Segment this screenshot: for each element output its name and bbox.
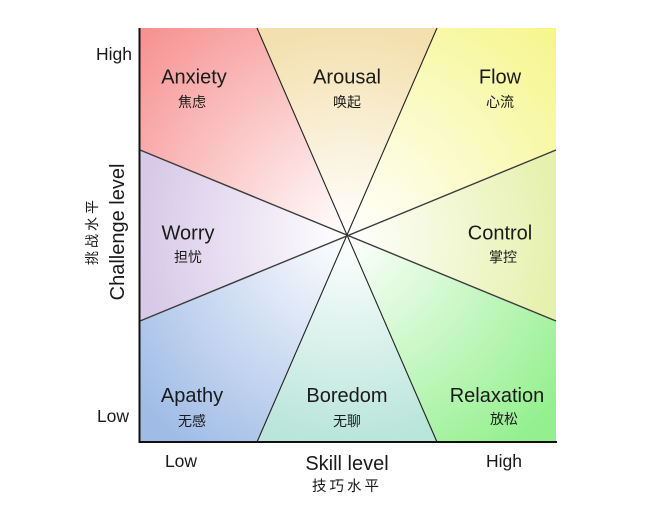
y axis tick: high: High: [96, 44, 132, 64]
label: boredom: [306, 385, 388, 429]
x axis tick: high: High: [486, 451, 522, 471]
label: control: Control: [468, 222, 532, 244]
x axis tick: low: Low: [165, 451, 197, 471]
panel: anxiety wedge: [140, 28, 347, 235]
label: apathy: [161, 385, 223, 429]
panel: flow wedge: [347, 28, 556, 235]
label: control: 掌控: [489, 249, 517, 265]
label: arousal: [313, 66, 381, 110]
label: worry: [162, 222, 214, 265]
label: flow: [479, 66, 522, 110]
wedge dividers: [140, 28, 556, 442]
label: boredom: 无聊: [333, 413, 361, 429]
y axis title: [84, 164, 129, 300]
panel: worry wedge: [140, 150, 347, 321]
label: control: [468, 222, 532, 265]
panel: relaxation wedge: [347, 235, 556, 442]
panel: control wedge: [347, 150, 556, 321]
y axis title: 挑战水平: [84, 197, 100, 265]
label: arousal: Arousal: [313, 66, 381, 88]
label: relaxation: Relaxation: [450, 385, 544, 407]
label: anxiety: [161, 66, 227, 110]
label: flow: 心流: [486, 94, 514, 110]
label: anxiety: Anxiety: [161, 66, 227, 88]
label: relaxation: [450, 385, 544, 427]
y axis tick: low: Low: [97, 406, 129, 426]
label: anxiety: 焦虑: [178, 94, 206, 110]
label: boredom: Boredom: [306, 385, 388, 407]
label: worry: 担忧: [174, 249, 202, 265]
panel: arousal wedge: [257, 28, 437, 235]
label: worry: Worry: [162, 222, 214, 244]
panel: apathy wedge: [140, 235, 347, 442]
chart axes: [140, 28, 557, 442]
x axis title: [305, 453, 389, 495]
y axis title: Challenge level: [107, 164, 129, 300]
x axis title: Skill level: [305, 453, 389, 475]
label: apathy: 无感: [178, 413, 206, 429]
label: apathy: Apathy: [161, 385, 223, 407]
panel: boredom wedge: [257, 235, 437, 442]
label: flow: Flow: [479, 66, 522, 88]
x axis title: 技巧水平: [312, 478, 382, 495]
label: arousal: 唤起: [333, 94, 361, 110]
label: relaxation: 放松: [490, 411, 518, 427]
